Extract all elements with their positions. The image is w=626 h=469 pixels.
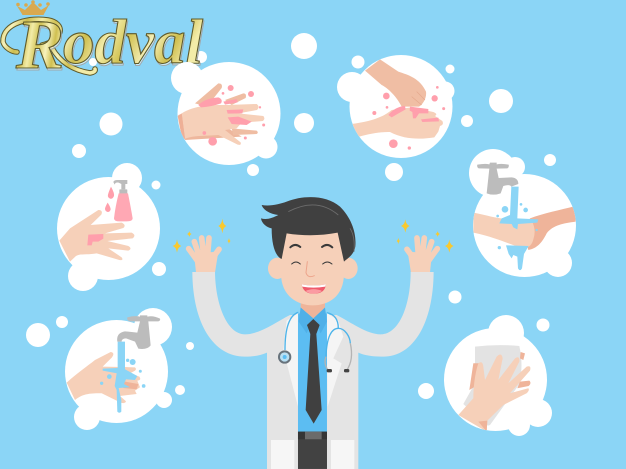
logo wordmark — [3, 6, 204, 86]
sparkles — [173, 219, 454, 253]
hand — [458, 355, 530, 432]
water stream — [100, 342, 145, 413]
panel: dry with towel — [444, 315, 552, 436]
face — [281, 230, 344, 305]
hands interlaced — [352, 59, 445, 150]
logo wordmark: R — [16, 9, 65, 86]
faucet — [117, 315, 160, 349]
faucet — [477, 163, 518, 195]
loose soap bubbles — [26, 33, 556, 399]
soap dispenser — [113, 180, 133, 221]
panel: apply soap from dispenser — [57, 163, 160, 291]
lab coat — [192, 272, 434, 469]
towel — [463, 345, 522, 425]
collar — [299, 307, 327, 333]
neck — [301, 297, 325, 318]
right arm — [523, 206, 576, 250]
soap on palm — [87, 234, 103, 245]
hair highlight — [288, 205, 354, 252]
necktie — [306, 319, 322, 424]
hands under water — [67, 352, 140, 403]
logo wordmark: R — [15, 7, 64, 84]
hair — [261, 197, 356, 262]
soap drops — [105, 187, 114, 212]
logo: Rodval — [3, 0, 204, 86]
panel: wash under faucet, right — [469, 149, 576, 277]
panel: rub backs of hands with soap — [171, 62, 280, 165]
nose — [306, 262, 314, 277]
ears — [268, 258, 358, 279]
stethoscope — [279, 312, 352, 372]
pockets — [271, 440, 354, 469]
lapels — [283, 313, 343, 407]
right hand — [407, 238, 437, 273]
left hand — [189, 238, 219, 273]
back fingers — [469, 352, 525, 390]
doctor — [173, 197, 454, 469]
water stream — [496, 187, 538, 270]
soap patches — [198, 85, 265, 146]
panel: wash under faucet, left — [65, 308, 172, 430]
logo wordmark: odval — [64, 8, 204, 79]
open hand — [59, 210, 134, 262]
logo wordmark: odval — [63, 6, 203, 77]
hands rubbing — [178, 83, 265, 146]
eyebrows and eyes — [290, 245, 332, 264]
trousers and belt — [298, 432, 327, 469]
mouth — [302, 284, 326, 294]
panel: rub palm over hand — [337, 55, 454, 158]
shirt — [298, 313, 327, 432]
left arm — [473, 213, 535, 248]
soap patches — [372, 86, 445, 150]
logo crown — [16, 0, 50, 15]
